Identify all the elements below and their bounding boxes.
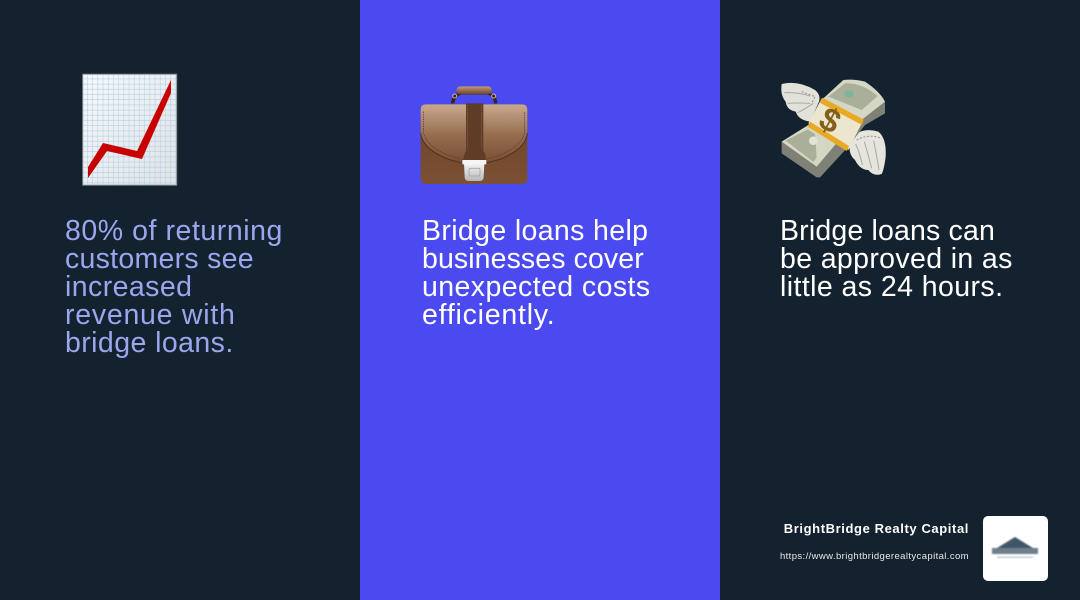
text: approval speed statement: Bridge loans can: [780, 215, 995, 247]
wing: upper left: [781, 83, 820, 122]
text: revenue statistic: increased: [65, 271, 192, 303]
text: approval speed statement: little as 24 hours.: [780, 271, 1003, 303]
icon: chart with upward trend: [82, 74, 178, 186]
text: unexpected costs statement: efficiently.: [422, 299, 555, 331]
handle: [451, 86, 497, 103]
paper band with dollar sign: $: [813, 100, 847, 142]
logo tile: [983, 516, 1048, 581]
panel: unexpected costs: [360, 0, 720, 600]
text: approval speed statement: be approved in as: [780, 243, 1013, 275]
brand name: BrightBridge Realty Capital: [784, 521, 969, 536]
text: unexpected costs statement: unexpected costs: [422, 271, 651, 303]
text: revenue statistic: bridge loans.: [65, 327, 234, 359]
money stack: [782, 102, 885, 177]
icon: briefcase: [420, 86, 528, 184]
panel: approval speed: [720, 0, 1080, 600]
icon: money with wings: [781, 80, 886, 178]
wing: lower right: [850, 130, 886, 175]
panel: revenue: [0, 0, 360, 600]
clasp: [462, 160, 486, 181]
text: unexpected costs statement: [422, 215, 651, 331]
text: revenue statistic: revenue with: [65, 299, 236, 331]
text: unexpected costs statement: Bridge loans help: [422, 215, 648, 247]
text: unexpected costs statement: businesses cover: [422, 243, 644, 275]
text: revenue statistic: customers see: [65, 243, 254, 275]
text: revenue statistic: [65, 215, 283, 359]
text: approval speed statement: [780, 215, 1013, 303]
text: revenue statistic: 80% of returning: [65, 215, 283, 247]
website url: https://www.brightbridgerealtycapital.com: [780, 551, 969, 562]
